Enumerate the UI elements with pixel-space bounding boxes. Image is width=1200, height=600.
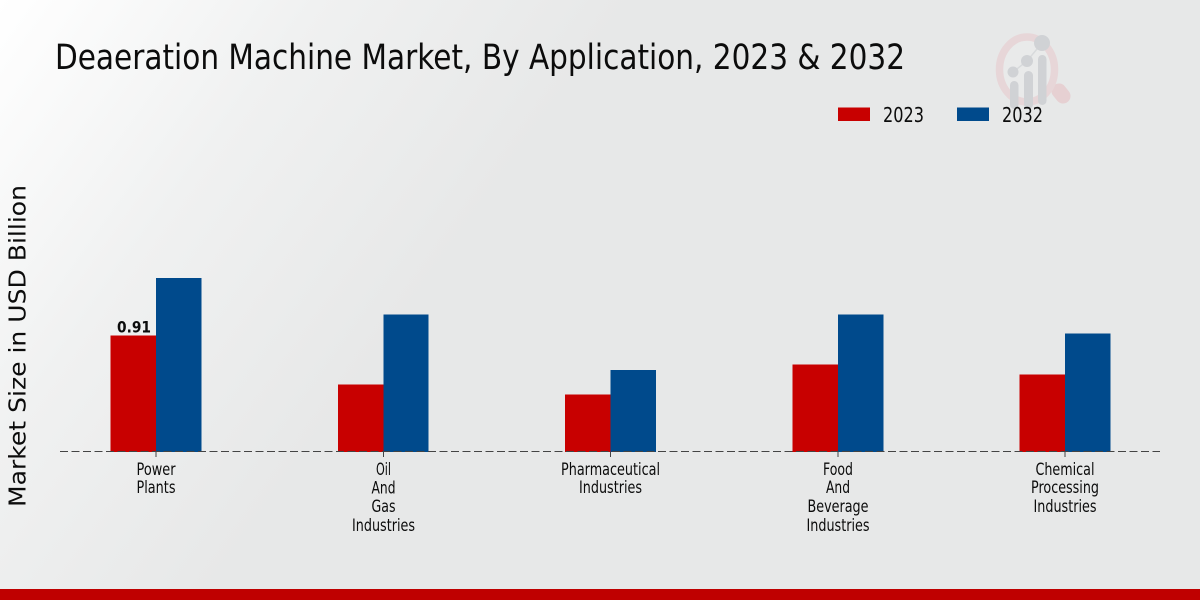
label: Oil And Gas Industries: Industries [352, 516, 415, 535]
data label: 0.91 [117, 318, 151, 336]
legend item: 2032 [957, 103, 1043, 127]
bars: Oil And Gas Industries [338, 314, 428, 452]
footer bar [0, 589, 1200, 600]
label: Food And Beverage Industries: Industries [806, 516, 870, 535]
legend item: 2032: 2032 [1002, 103, 1043, 127]
label: Oil And Gas Industries [352, 460, 415, 535]
label: Power Plants [136, 460, 176, 497]
label: Oil And Gas Industries: Gas [372, 497, 396, 516]
label: Chemical Processing Industries: Chemical [1036, 460, 1094, 479]
label: Chemical Processing Industries [1031, 460, 1099, 516]
bars: Food And Beverage Industries [792, 314, 884, 452]
label: Power Plants: Plants [136, 478, 176, 497]
bars: Power Plants [110, 278, 202, 452]
label: Food And Beverage Industries: And [826, 478, 850, 497]
label: Food And Beverage Industries [806, 460, 870, 535]
label: Food And Beverage Industries: Food [823, 460, 853, 479]
label: Pharmaceutical Industries [561, 460, 660, 497]
label: Pharmaceutical Industries: Pharmaceutical [561, 460, 660, 479]
legend [838, 103, 1043, 127]
y axis label: Market Size in USD Billion [6, 185, 32, 507]
label: Pharmaceutical Industries: Industries [579, 478, 642, 497]
label: Food And Beverage Industries: Beverage [808, 497, 868, 516]
category labels [136, 460, 1099, 535]
label: Oil And Gas Industries: Oil [376, 460, 391, 479]
bars: Chemical Processing Industries [1020, 334, 1110, 452]
legend item: 2023 [838, 103, 924, 127]
legend item: 2023: 2023 [883, 103, 924, 127]
title: Deaeration Machine Market, By Application, 2023 & 2032 [55, 38, 905, 78]
label: Oil And Gas Industries: And [372, 478, 396, 498]
icon: watermark logo [1000, 35, 1063, 109]
label: Chemical Processing Industries: Industries [1034, 497, 1096, 516]
bar chart [60, 278, 1160, 457]
bars: Pharmaceutical Industries [565, 370, 656, 452]
label: Power Plants: Power [136, 460, 176, 479]
label: Chemical Processing Industries: Processing [1031, 478, 1099, 497]
